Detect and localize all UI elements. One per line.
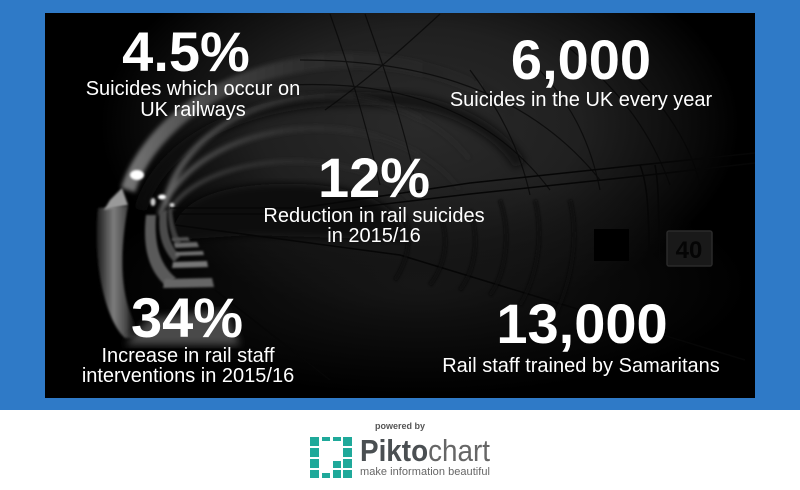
stat: 12%: Reduction in rail suicides	[263, 205, 485, 227]
upper wall glow	[136, 13, 703, 252]
lower track bed	[210, 270, 628, 354]
inner tunnel shade	[212, 182, 406, 241]
tunnel photograph	[45, 13, 755, 398]
stat: 4.5%: UK railways	[140, 99, 246, 121]
stat: 34%: 34%	[131, 286, 243, 349]
stat: 4.5%: 4.5%	[122, 20, 250, 83]
speed sign 40	[667, 231, 712, 266]
speed sign 40: 40	[676, 237, 702, 264]
tagline: make information beautiful	[360, 466, 490, 478]
stat: 4.5%: Suicides which occur on	[86, 78, 300, 100]
stat: 6,000: Suicides in the UK every year	[450, 89, 713, 111]
lit floor under figure	[125, 310, 240, 345]
stat: 6,000	[450, 28, 713, 111]
footer: Piktochart branding	[310, 421, 490, 478]
stat: 34%: interventions in 2015/16	[82, 365, 294, 387]
cable trays	[170, 161, 671, 300]
stat: 4.5%	[86, 20, 300, 121]
lamp highlights	[104, 170, 174, 210]
stat: 34%	[82, 286, 294, 387]
stat: 13,000	[442, 292, 720, 377]
stat: 12%	[263, 146, 485, 247]
concentric tunnel rings	[119, 56, 376, 216]
stat: 12%: 12%	[318, 146, 430, 209]
far wall ribs	[394, 200, 576, 290]
dark band between outer rings	[204, 90, 525, 168]
left bright rib	[96, 206, 135, 339]
powered by: powered by	[375, 421, 425, 431]
stat: 13,000: 13,000	[496, 292, 668, 355]
stat: 6,000: 6,000	[511, 28, 651, 91]
stat: 13,000: Rail staff trained by Samaritans	[442, 355, 720, 377]
panel seams on tunnel wall	[290, 14, 700, 195]
stat: 34%: Increase in rail staff	[101, 345, 275, 367]
black wall panel	[594, 229, 629, 261]
second and third ribs	[145, 208, 181, 286]
wordmark: Piktochart	[360, 433, 490, 468]
stat: 12%: in 2015/16	[327, 225, 421, 247]
icon: Piktochart logo	[310, 437, 352, 478]
bright floor strips	[163, 237, 214, 288]
